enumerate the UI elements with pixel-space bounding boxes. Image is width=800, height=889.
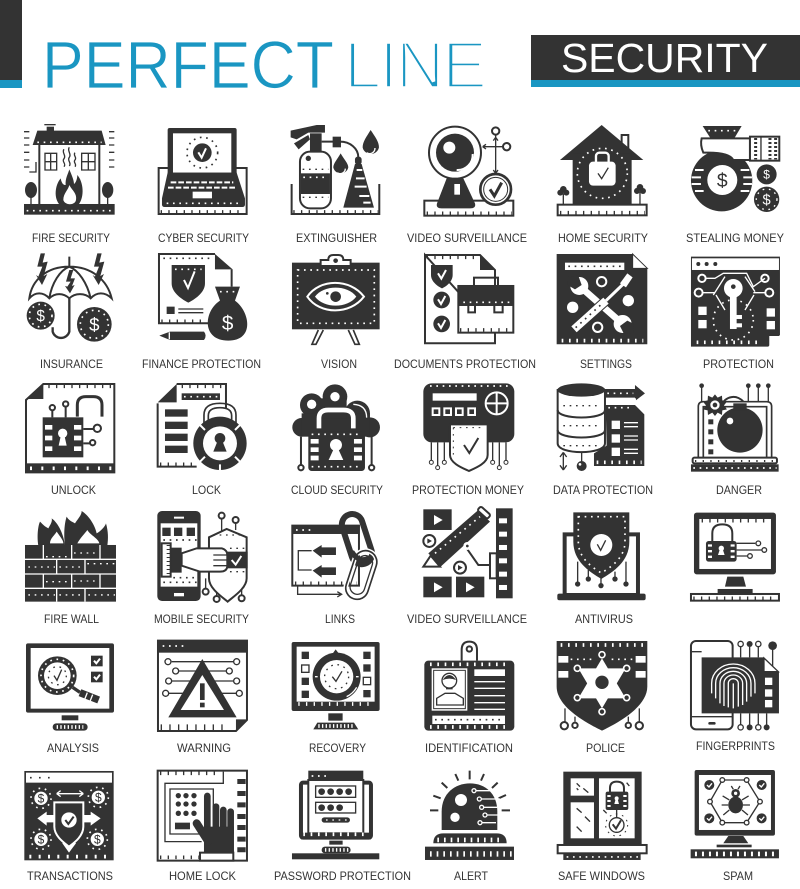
label: fire security: FIRE SECURITY bbox=[32, 231, 110, 245]
label: identification: IDENTIFICATION bbox=[425, 741, 513, 755]
label: finance protection: FINANCE PROTECTION bbox=[142, 357, 261, 371]
title: perfect line: PERFECT bbox=[42, 28, 334, 103]
icon: insurance umbrella bbox=[27, 253, 112, 342]
icon: analysis bbox=[26, 643, 114, 731]
icon: password protection bbox=[292, 771, 379, 859]
icon: transactions: $ bbox=[38, 833, 45, 847]
label: insurance: INSURANCE bbox=[40, 357, 103, 371]
label: video surveillance: VIDEO SURVEILLANCE bbox=[407, 231, 527, 245]
icon: transactions: $ bbox=[95, 791, 102, 805]
icon: stealing money: $ bbox=[763, 193, 771, 209]
icon: stealing money: $ bbox=[763, 168, 770, 182]
icon: insurance umbrella: $ bbox=[36, 308, 45, 325]
label: links: LINKS bbox=[325, 612, 355, 626]
icon: alert bbox=[425, 771, 514, 860]
label: danger: DANGER bbox=[716, 483, 762, 497]
label: warning: WARNING bbox=[177, 741, 231, 755]
icon: video surveillance film bbox=[423, 506, 513, 598]
icon: data protection bbox=[557, 383, 645, 471]
icon: cyber security bbox=[159, 128, 247, 214]
icon: vision bbox=[292, 255, 380, 344]
label: police: POLICE bbox=[586, 741, 625, 755]
icon: finance protection bbox=[159, 254, 247, 341]
icon: home security bbox=[557, 125, 647, 215]
label: video surveillance: VIDEO SURVEILLANCE bbox=[407, 612, 527, 626]
label: data protection: DATA PROTECTION bbox=[553, 483, 653, 497]
icon: stealing money: $ bbox=[717, 171, 728, 192]
icon: cloud security bbox=[292, 384, 380, 471]
section banner: security bbox=[531, 35, 800, 87]
icon: unlock bbox=[26, 384, 114, 473]
label: antivirus: ANTIVIRUS bbox=[575, 612, 633, 626]
icon: home lock bbox=[158, 771, 247, 861]
label: settings: SETTINGS bbox=[580, 357, 632, 371]
section banner: security: SECURITY bbox=[561, 35, 768, 81]
icon: transactions bbox=[24, 771, 114, 860]
label: spam: SPAM bbox=[723, 869, 753, 883]
icon: transactions: $ bbox=[38, 792, 45, 806]
icon: protection money bbox=[423, 383, 514, 471]
icon: insurance umbrella: $ bbox=[89, 314, 100, 335]
icon: warning bbox=[157, 640, 248, 732]
icon: transactions: $ bbox=[94, 833, 101, 847]
label: lock: LOCK bbox=[192, 483, 221, 497]
label: mobile security: MOBILE SECURITY bbox=[154, 612, 249, 626]
icon: antivirus bbox=[557, 512, 646, 600]
label: stealing money: STEALING MONEY bbox=[686, 231, 784, 245]
icon: links bbox=[292, 511, 380, 602]
label: cyber security: CYBER SECURITY bbox=[158, 231, 249, 245]
icon: lock bbox=[158, 384, 247, 470]
label: unlock: UNLOCK bbox=[51, 483, 96, 497]
label: fingerprints: FINGERPRINTS bbox=[696, 739, 775, 753]
title: perfect line: LINE bbox=[344, 28, 487, 103]
label: safe windows: SAFE WINDOWS bbox=[558, 869, 645, 883]
icon: documents protection bbox=[425, 255, 513, 343]
label: analysis: ANALYSIS bbox=[47, 741, 99, 755]
label: documents protection: DOCUMENTS PROTECTION bbox=[394, 357, 536, 371]
icon: spam bbox=[691, 770, 779, 858]
icon: stealing money bbox=[691, 126, 779, 212]
icon: mobile security bbox=[157, 511, 248, 602]
label: password protection: PASSWORD PROTECTION bbox=[274, 869, 411, 883]
icon: fire wall bbox=[25, 511, 116, 602]
label: cloud security: CLOUD SECURITY bbox=[291, 483, 383, 497]
icon: locked monitor bbox=[691, 513, 779, 601]
icon: danger bbox=[691, 383, 779, 472]
icon: fingerprints bbox=[691, 641, 779, 730]
label: alert: ALERT bbox=[454, 869, 489, 883]
icon: recovery bbox=[292, 642, 380, 729]
label: vision: VISION bbox=[321, 357, 357, 371]
icon: identification bbox=[424, 642, 514, 731]
icon: protection bbox=[691, 257, 780, 347]
label: protection: PROTECTION bbox=[703, 357, 774, 371]
icon: fire security bbox=[24, 125, 115, 215]
label: home lock: HOME LOCK bbox=[169, 869, 236, 883]
label: protection money: PROTECTION MONEY bbox=[412, 483, 524, 497]
left header accent bar bbox=[0, 0, 22, 88]
icon: settings bbox=[557, 254, 647, 344]
icon: finance protection: $ bbox=[222, 312, 234, 335]
icon: safe windows bbox=[558, 772, 647, 860]
label: extinguisher: EXTINGUISHER bbox=[296, 231, 377, 245]
label: transactions: TRANSACTIONS bbox=[27, 869, 113, 883]
icon: extinguisher bbox=[291, 125, 379, 214]
icon: police bbox=[557, 641, 647, 731]
label: recovery: RECOVERY bbox=[309, 741, 366, 755]
icon: video surveillance camera bbox=[424, 127, 513, 216]
label: home security: HOME SECURITY bbox=[558, 231, 648, 245]
label: fire wall: FIRE WALL bbox=[44, 612, 99, 626]
